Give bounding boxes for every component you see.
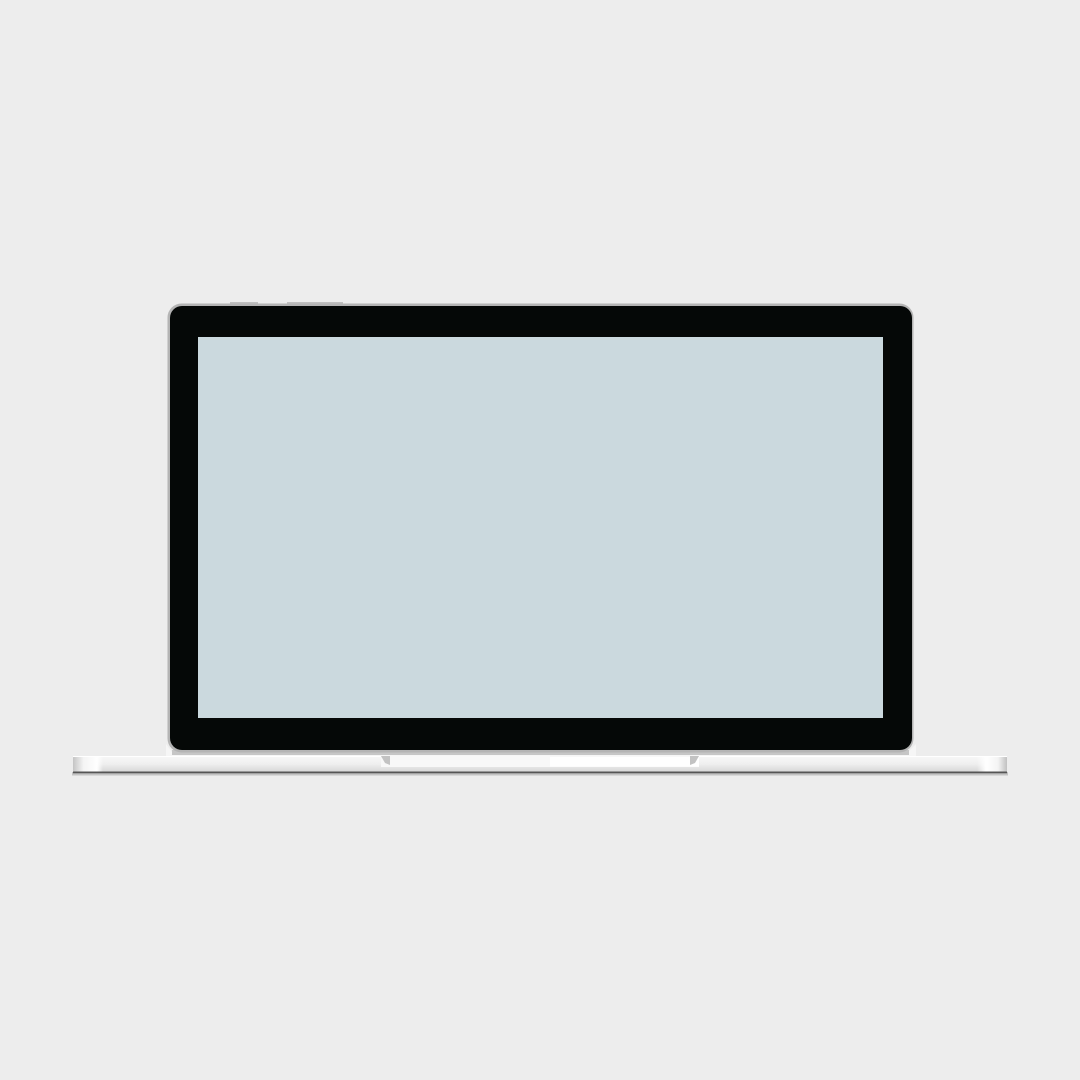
trackpad notch — [381, 756, 699, 767]
laptop lid bezel — [168, 304, 914, 752]
laptop base — [72, 756, 1008, 776]
top edge bumps — [230, 302, 343, 304]
black screen frame — [170, 306, 912, 750]
screen — [198, 337, 883, 718]
hinge area — [166, 744, 916, 756]
laptop — [72, 302, 1008, 776]
